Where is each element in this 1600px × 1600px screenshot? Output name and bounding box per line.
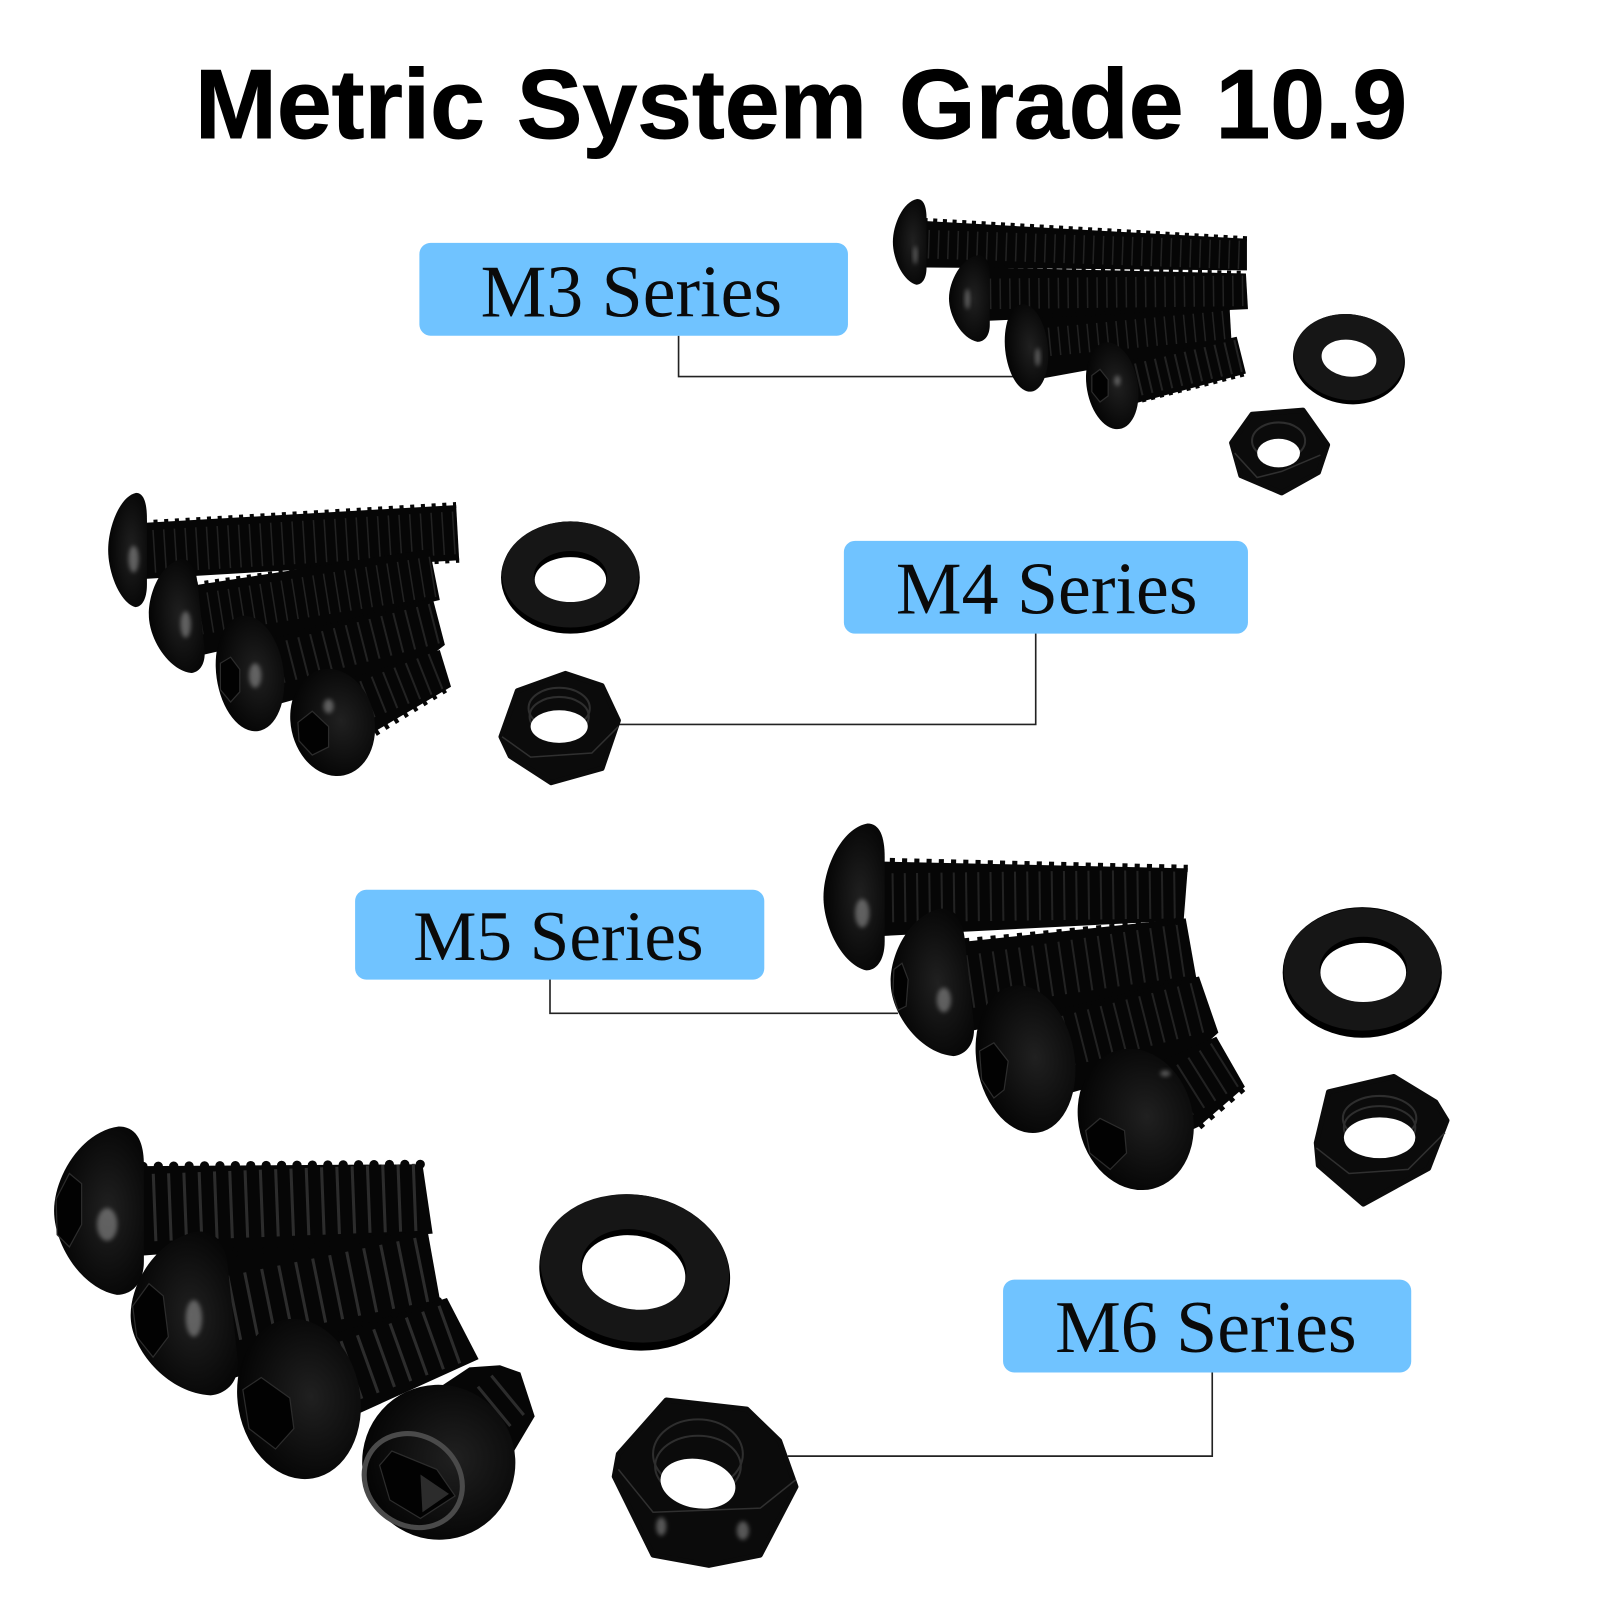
panel: M4 hardware — [108, 493, 640, 784]
bolt: M4 third — [209, 598, 445, 736]
connector: M5 label to bolt — [550, 979, 898, 1013]
bolt: M5 second — [883, 906, 1197, 1062]
nut: M6 — [614, 1400, 796, 1565]
bolt: M3 longest — [893, 199, 1247, 285]
bolt: M3 second — [949, 255, 1248, 342]
label: M3 Series — [419, 243, 848, 336]
bolt: M5 third — [964, 977, 1218, 1141]
washer: M6 — [527, 1179, 743, 1365]
panel: M6 hardware — [54, 1127, 796, 1565]
bolt: M6 second — [122, 1229, 440, 1403]
panel: M5 hardware — [823, 823, 1447, 1204]
bolt: M4 shortest — [280, 650, 451, 784]
title: Metric System Grade 10.9 — [195, 49, 1407, 159]
label: M6 Series: M6 Series — [1055, 1286, 1357, 1368]
label: M3 Series: M3 Series — [481, 250, 782, 332]
bolt: M5 shortest — [1063, 1036, 1245, 1203]
label: M6 Series — [1003, 1280, 1411, 1372]
nut: M3 — [1232, 410, 1328, 493]
bolt: M4 second — [143, 549, 440, 677]
bolt: M6 shortest — [346, 1365, 535, 1556]
panel: M3 hardware — [893, 199, 1411, 493]
bolt: M3 shortest — [1080, 337, 1246, 433]
connector: M6 label to nut — [788, 1372, 1212, 1456]
washer: M5 — [1283, 907, 1442, 1038]
label: M4 Series — [844, 541, 1248, 634]
bolt: M5 longest — [823, 823, 1188, 970]
nut: M5 — [1316, 1077, 1447, 1204]
connector: M4 label to nut — [617, 633, 1036, 724]
label: M4 Series: M4 Series — [896, 547, 1197, 629]
bolt: M6 longest — [54, 1127, 433, 1295]
label: M5 Series: M5 Series — [413, 898, 704, 976]
connector: M3 label to bolt — [679, 336, 1031, 377]
washer: M4 — [501, 521, 640, 634]
label: M5 Series — [355, 890, 764, 980]
bolt: M4 longest — [108, 493, 459, 607]
nut: M4 — [501, 673, 618, 783]
bolt: M6 third — [225, 1298, 479, 1489]
washer: M3 — [1287, 307, 1411, 411]
bolt: M3 third — [1001, 302, 1232, 394]
